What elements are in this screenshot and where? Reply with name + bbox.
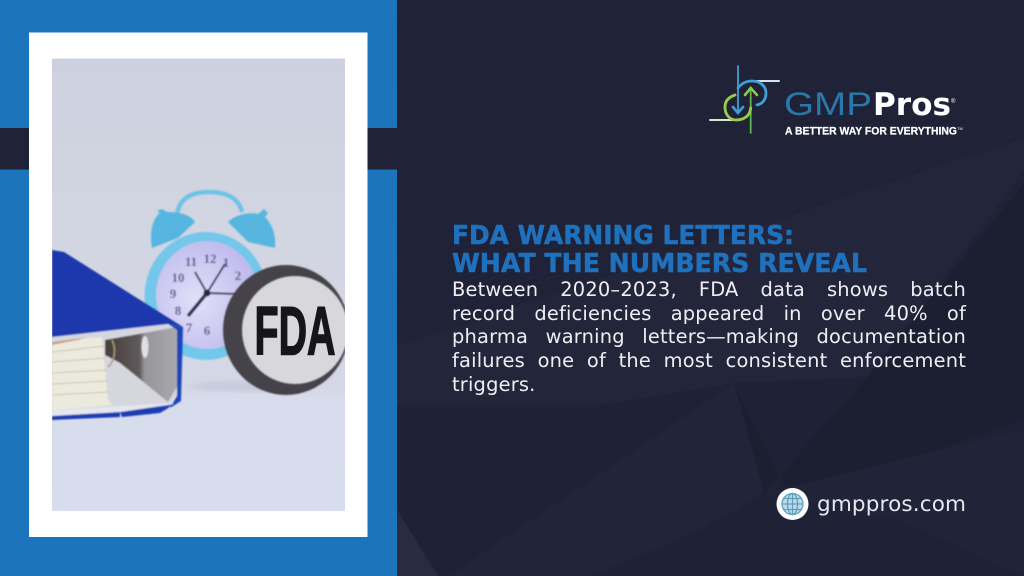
blue left panel xyxy=(0,0,397,576)
body paragraph xyxy=(452,278,966,396)
body paragraph: record deficiencies appeared in over 40% of xyxy=(452,302,966,325)
icon: alarm clock: 7 xyxy=(186,320,193,335)
body paragraph: pharma warning letters—making documentation xyxy=(452,325,966,348)
icon: alarm clock: 10 xyxy=(172,270,184,285)
logo: GMP Pros: Pros xyxy=(873,87,951,123)
icon: alarm clock: 12 xyxy=(204,251,216,266)
icon: logo mark xyxy=(710,66,779,133)
logo: GMP Pros: A BETTER WAY FOR EVERYTHING xyxy=(785,126,957,138)
white photo frame xyxy=(29,32,368,537)
icon: alarm clock: 9 xyxy=(170,286,177,301)
logo: GMP Pros xyxy=(710,66,963,138)
title: WHAT THE NUMBERS REVEAL xyxy=(452,249,867,279)
icon: globe xyxy=(776,488,808,520)
body paragraph: triggers. xyxy=(452,373,536,396)
logo: GMP Pros: ® xyxy=(951,98,956,105)
dark geometric background xyxy=(397,0,1024,576)
title: FDA WARNING LETTERS: xyxy=(452,221,794,251)
title xyxy=(452,221,867,279)
body paragraph: failures one of the most consistent enforcement xyxy=(452,349,966,372)
icon: FDA badge xyxy=(223,265,349,395)
body paragraph: Between 2020–2023, FDA data shows batch xyxy=(452,278,966,301)
dark horizontal band xyxy=(0,128,397,170)
icon: alarm clock: 11 xyxy=(185,254,197,269)
icon: alarm clock: 6 xyxy=(204,323,211,338)
logo: GMP Pros: TM xyxy=(957,126,963,131)
logo: GMP Pros: GMP xyxy=(784,86,872,122)
icon: alarm clock: 8 xyxy=(175,303,182,318)
icon: alarm clock: 1 xyxy=(223,255,229,270)
photo: binder, clock and FDA badge xyxy=(52,58,349,511)
website url: gmppros.com xyxy=(817,492,966,517)
icon: FDA badge: FDA xyxy=(254,292,336,370)
icon: alarm clock: 2 xyxy=(235,268,241,283)
icon: alarm clock xyxy=(144,192,275,360)
icon: blue binder xyxy=(52,250,183,420)
